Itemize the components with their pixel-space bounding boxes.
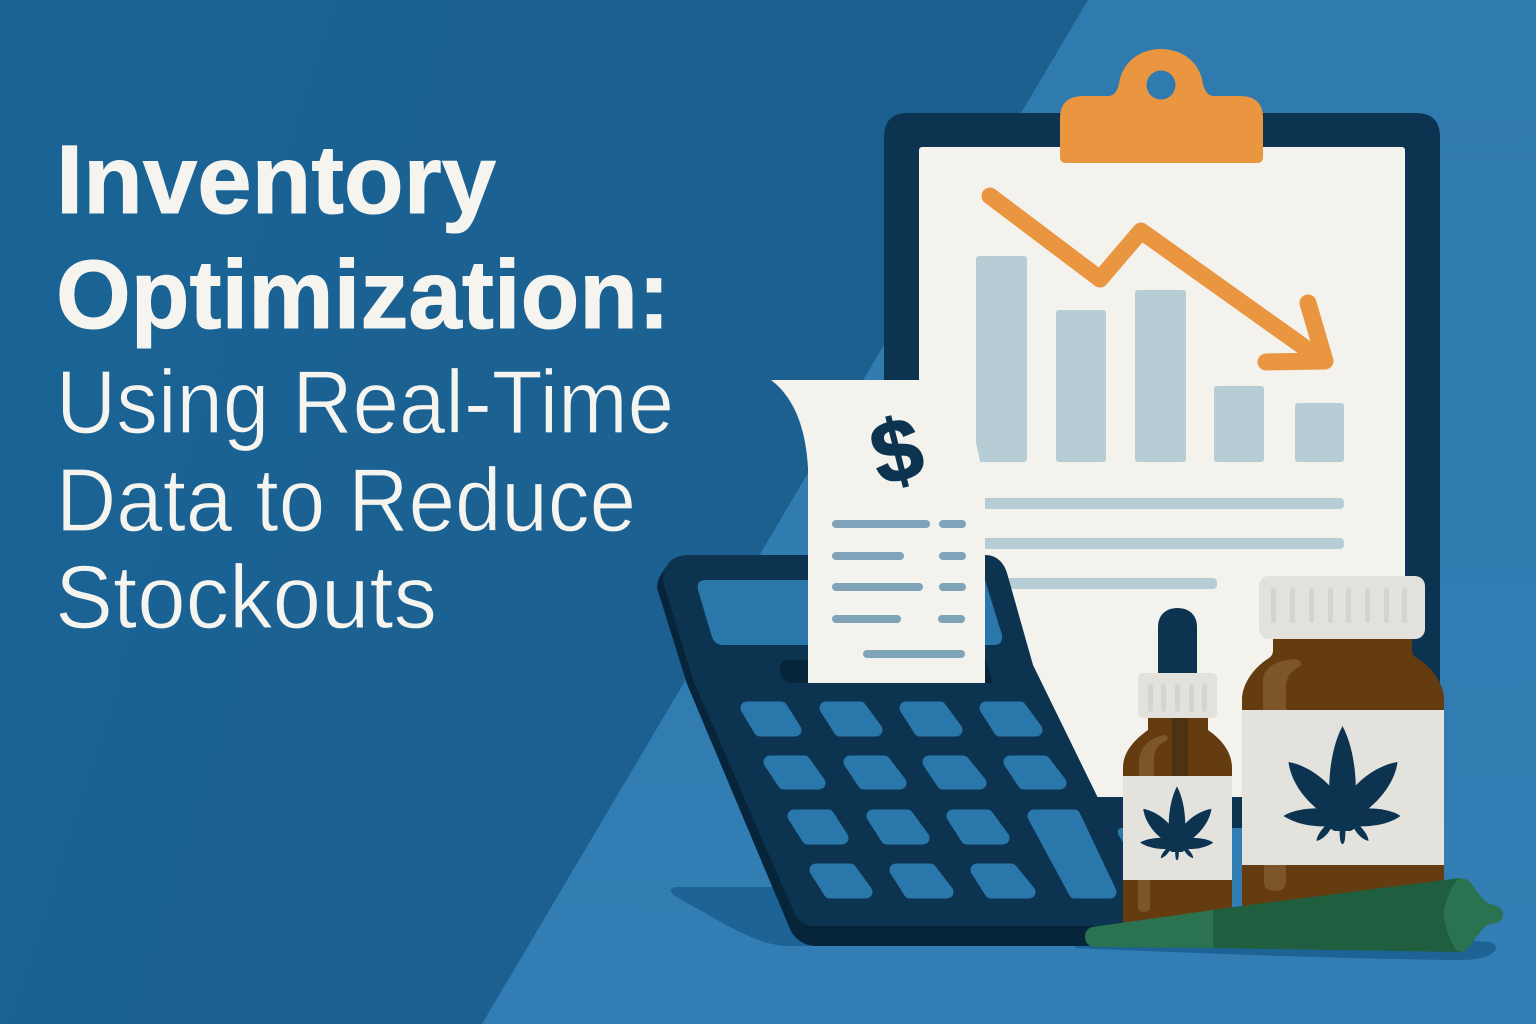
calculator keys [747,708,1110,892]
large jar [1242,576,1444,930]
jar cap [1259,576,1425,639]
calculator screen [698,580,1002,645]
cone twisted end [1444,878,1503,952]
heading line: Optimization:: Optimization: [56,240,670,349]
subheading line: Stockouts: Stockouts [55,548,437,648]
orange clip [1060,49,1263,163]
subheading line: Using Real-Time: Using Real-Time [56,353,674,453]
large cannabis leaf icon [1284,726,1400,844]
jar body [1242,636,1444,930]
receipt [771,380,985,683]
partly hidden key [1118,828,1130,844]
cap ridges [1148,684,1207,712]
calculator [657,555,1130,946]
jar highlight [1263,659,1301,711]
calculator ground shadow [671,887,830,946]
title [55,125,674,648]
clipboard board [884,113,1440,828]
subheading line: Data to Reduce: Data to Reduce [56,451,636,551]
small label [1123,776,1232,880]
receipt line items [832,520,966,658]
dropper bottle body [1123,716,1232,930]
text lines on paper [970,498,1344,589]
calculator body [663,555,1123,926]
jar lower highlight [1264,865,1286,891]
clipboard with chart [884,49,1440,828]
dropper bottle [1123,608,1232,930]
heading line: Inventory: Inventory [56,125,496,234]
bar chart [976,256,1344,462]
jar cap ridges [1271,588,1407,623]
dropper cap [1138,673,1217,718]
receipt paper [771,380,985,683]
receipt slot [780,660,992,683]
cone body dark [1210,878,1460,952]
cone shadow [1075,940,1496,960]
background: dark diagonal panel [0,0,1088,1024]
calculator side edge [657,566,1123,946]
dropper teat [1158,608,1197,675]
cone tip light [1085,910,1213,948]
dollar sign: $ [861,397,932,504]
lower highlight [1138,880,1150,912]
trend arrow [990,196,1325,362]
dropper tube [1172,718,1188,778]
pre-roll cone [1075,878,1503,960]
paper sheet [919,147,1405,797]
bottle highlight [1139,735,1168,778]
small cannabis leaf icon [1140,786,1213,860]
jar label [1242,710,1444,865]
